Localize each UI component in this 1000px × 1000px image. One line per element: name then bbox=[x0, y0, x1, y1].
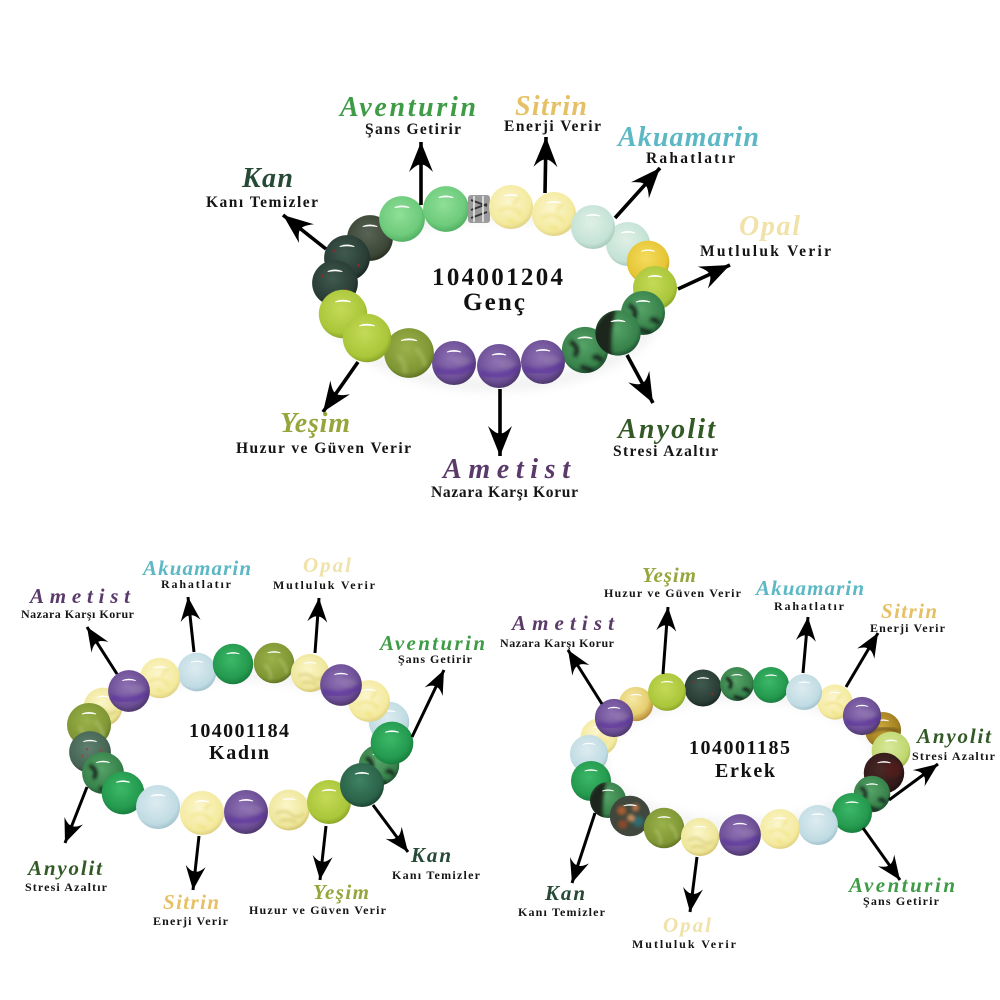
arrow: Ametist left bbox=[87, 627, 117, 674]
label: Kan right: Kan bbox=[544, 881, 585, 905]
bead: ametist bottom bbox=[224, 790, 268, 834]
arrow: Opal bbox=[678, 265, 730, 289]
bead: yeşim bottom bbox=[644, 808, 684, 848]
bracelet: 104001184 Kadın bbox=[67, 643, 413, 835]
label: Aventurin top: Aventurin bbox=[338, 92, 476, 123]
label: Opal left: Opal bbox=[303, 553, 351, 577]
label: Sitrin top: Enerji Verir bbox=[504, 118, 601, 135]
bead: anyolit 1 bbox=[621, 291, 665, 335]
bead: sitrin top bbox=[817, 684, 853, 720]
bead: ametist right bbox=[843, 697, 881, 735]
label: Opal top bbox=[700, 211, 831, 260]
bead: sitrin left bbox=[581, 719, 617, 755]
label: Kan right bbox=[518, 881, 606, 919]
arrow: Yeşim left bbox=[320, 826, 326, 880]
bead: yeşim top bbox=[254, 643, 294, 683]
label: Yeşim left: Huzur ve Güven Verir bbox=[249, 903, 387, 917]
bead: aventurin bottom bbox=[832, 793, 872, 833]
label: Kan right: Kanı Temizler bbox=[518, 905, 606, 919]
label: Anyolit left: Stresi Azaltır bbox=[25, 880, 108, 894]
bead: akuamarin 1 bbox=[571, 205, 615, 249]
bead: anyolit left bbox=[82, 752, 124, 794]
label: Sitrin top: Sitrin bbox=[515, 91, 587, 122]
bead: ametist 1 bbox=[521, 340, 565, 384]
label: Anyolit right bbox=[912, 724, 996, 763]
label: Kan left: Kanı Temizler bbox=[392, 868, 481, 882]
bead: opal left bbox=[84, 688, 122, 726]
bead: anyolit 3 bbox=[562, 327, 608, 373]
label: Anyolit right: Stresi Azaltır bbox=[912, 749, 996, 763]
arrow: Opal left bbox=[315, 598, 319, 653]
label: Anyolit left: Anyolit bbox=[26, 856, 103, 880]
label: Sitrin right: Enerji Verir bbox=[870, 621, 946, 635]
label: Aventurin top: Şans Getirir bbox=[365, 121, 461, 138]
bead: anyolit left bbox=[588, 782, 626, 820]
label: Aventurin left bbox=[378, 631, 485, 666]
arrow: Aventurin bbox=[419, 142, 423, 205]
bead: kan right bbox=[864, 753, 904, 793]
bead: opal top bbox=[291, 654, 329, 692]
label: Aventurin left: Şans Getirir bbox=[398, 652, 473, 666]
label: Opal right: Opal bbox=[663, 913, 711, 937]
bead: aventurin top bbox=[753, 667, 789, 703]
label: Opal right: Mutluluk Verir bbox=[632, 937, 737, 951]
bead: opal top bbox=[619, 687, 653, 721]
bead: sitrin bottom bbox=[180, 791, 224, 835]
bead: yeşim 2 bbox=[343, 314, 391, 362]
label: Yeşim top: Huzur ve Güven Verir bbox=[236, 440, 411, 457]
bead: kan jasper bbox=[610, 796, 650, 836]
arrow: Akuamarin bbox=[615, 168, 660, 218]
bead: yeşim 3 bbox=[319, 290, 367, 338]
arrow: Sitrin right bbox=[846, 633, 878, 687]
bead: akuamarin top bbox=[786, 674, 822, 710]
label: Anyolit top: Stresi Azaltır bbox=[613, 443, 718, 460]
bead: akuamarin bottom bbox=[798, 805, 838, 845]
label: Akuamarin left: Akuamarin bbox=[141, 556, 251, 580]
label: Aventurin top bbox=[338, 92, 476, 138]
product code: 104001204 Genç: 104001204 bbox=[432, 264, 564, 291]
label: Akuamarin right: Akuamarin bbox=[754, 576, 864, 600]
product code: 104001184 Kadın: 104001184 bbox=[189, 720, 289, 742]
bead: aventurin left bbox=[379, 196, 425, 242]
arrow: Kan right bbox=[572, 813, 595, 883]
bead: akuamarin top bbox=[178, 653, 216, 691]
bead: opal 1 bbox=[627, 241, 669, 283]
arrow: Aventurin right bbox=[863, 828, 900, 880]
label: Ametist top bbox=[431, 454, 578, 501]
label: Akuamarin left bbox=[141, 556, 251, 591]
label: Kan top: Kanı Temizler bbox=[206, 194, 318, 211]
label: Anyolit top: Anyolit bbox=[616, 414, 716, 445]
product code: 104001185 Erkek bbox=[689, 737, 790, 782]
arrow: Ametist bbox=[498, 389, 502, 456]
bead: yeşim top bbox=[648, 673, 686, 711]
bead: aventurin left bbox=[102, 772, 144, 814]
label: Opal left: Mutluluk Verir bbox=[273, 578, 376, 592]
label: Anyolit right: Anyolit bbox=[915, 724, 992, 748]
bead: anyolit top bbox=[720, 667, 754, 701]
arrow: Yeşim right bbox=[663, 607, 668, 674]
label: Akuamarin right: Rahatlatır bbox=[774, 599, 845, 613]
arrow: Kan bbox=[283, 215, 326, 249]
bead: opal bottom bbox=[269, 790, 309, 830]
bead: kan left bbox=[69, 731, 111, 773]
arrow: Sitrin left bbox=[193, 836, 199, 890]
product code: 104001185 Erkek: Erkek bbox=[715, 760, 776, 782]
bead: sitrin right bbox=[532, 192, 576, 236]
label: Yeşim right bbox=[604, 563, 742, 600]
label: Ametist top: Ametist bbox=[441, 454, 571, 485]
label: Sitrin left: Enerji Verir bbox=[153, 914, 229, 928]
label: Opal left bbox=[273, 553, 376, 592]
arrow: Kan left bbox=[373, 805, 408, 852]
bead: yeşim bottom bbox=[307, 780, 351, 824]
label: Anyolit left bbox=[25, 856, 108, 894]
label: Ametist top: Nazara Karşı Korur bbox=[431, 484, 578, 501]
product code: 104001185 Erkek: 104001185 bbox=[689, 737, 790, 759]
product code: 104001184 Kadın: Kadın bbox=[209, 742, 269, 764]
bead: kan top bbox=[685, 670, 721, 706]
bracelet: 104001204 Genç bbox=[312, 185, 677, 388]
label: Ametist right bbox=[500, 611, 615, 650]
label: Opal right bbox=[632, 913, 737, 951]
bead: akuamarin 2 bbox=[606, 222, 650, 266]
bead: aventurin right bbox=[371, 722, 413, 764]
label: Ametist left: Nazara Karşı Korur bbox=[21, 607, 135, 621]
label: Akuamarin left: Rahatlatır bbox=[161, 577, 232, 591]
bead: yeşim right bbox=[872, 732, 910, 770]
label: Yeşim right: Yeşim bbox=[642, 563, 696, 587]
bead: aventurin right bbox=[423, 186, 469, 232]
bead: akuamarin left bbox=[570, 735, 608, 773]
label: Sitrin right bbox=[870, 599, 946, 635]
arrow: Ametist right bbox=[568, 650, 602, 704]
arrow: Akuamarin left bbox=[188, 597, 194, 652]
label: Kan top: Kan bbox=[241, 163, 293, 194]
label: Sitrin left: Sitrin bbox=[163, 890, 219, 914]
arrow: Aventurin left bbox=[412, 670, 444, 737]
label: Aventurin right: Aventurin bbox=[847, 873, 955, 897]
label: Akuamarin right bbox=[754, 576, 864, 613]
bead: akuamarin bottom bbox=[136, 785, 180, 829]
arrow: Anyolit left bbox=[65, 787, 87, 843]
bead: opal bottom bbox=[681, 818, 719, 856]
label: Ametist right: Ametist bbox=[510, 611, 615, 635]
bead: opal 2 bbox=[633, 266, 677, 310]
product code: 104001184 Kadın bbox=[189, 720, 289, 764]
bead: ametist 2 bbox=[477, 344, 521, 388]
bead: opal right bbox=[865, 712, 901, 748]
bead: yeşim left bbox=[67, 703, 111, 747]
arrow: Anyolit bbox=[627, 355, 653, 403]
label: Yeşim top: Yeşim bbox=[280, 408, 350, 439]
label: Aventurin left: Aventurin bbox=[378, 631, 485, 655]
bead: sitrin bottom bbox=[760, 809, 800, 849]
arrow: Anyolit right bbox=[889, 764, 938, 800]
label: Sitrin left bbox=[153, 890, 229, 928]
label: Yeşim left: Yeşim bbox=[313, 880, 369, 904]
bead: sitrin left bbox=[489, 185, 533, 229]
label: Sitrin top bbox=[504, 91, 601, 135]
bead: ametist left bbox=[595, 699, 633, 737]
label: Opal top: Opal bbox=[739, 211, 800, 242]
label: Aventurin right: Şans Getirir bbox=[863, 894, 940, 908]
bead: ametist bottom bbox=[719, 814, 761, 856]
bead: metal spacer bbox=[468, 195, 490, 223]
arrow: Akuamarin right bbox=[803, 617, 808, 673]
bead: kan right bbox=[340, 763, 384, 807]
label: Akuamarin top: Akuamarin bbox=[616, 122, 759, 153]
label: Kan left: Kan bbox=[410, 843, 451, 867]
label: Ametist right: Nazara Karşı Korur bbox=[500, 636, 615, 650]
label: Akuamarin top bbox=[616, 122, 759, 167]
bracelet: 104001185 Erkek bbox=[570, 667, 910, 856]
label: Akuamarin top: Rahatlatır bbox=[646, 150, 735, 167]
bead: akuamarin right bbox=[369, 702, 409, 742]
bead: aventurin top bbox=[213, 644, 253, 684]
label: Yeşim left bbox=[249, 880, 387, 917]
bead: kan dark bbox=[312, 260, 358, 306]
product code: 104001204 Genç bbox=[432, 264, 564, 316]
label: Yeşim top bbox=[236, 408, 411, 457]
label: Ametist left bbox=[21, 584, 135, 621]
bead: aventurin left bbox=[571, 761, 611, 801]
bead: kan brown bbox=[347, 215, 393, 261]
label: Aventurin right bbox=[847, 873, 955, 908]
bead: anyolit right bbox=[854, 776, 890, 812]
bead: sitrin top bbox=[140, 658, 180, 698]
label: Anyolit top bbox=[613, 414, 718, 460]
label: Yeşim right: Huzur ve Güven Verir bbox=[604, 586, 742, 600]
arrow: Yeşim bbox=[323, 362, 358, 412]
product code: 104001204 Genç: Genç bbox=[463, 289, 525, 316]
bead: ametist 3 bbox=[432, 341, 476, 385]
label: Kan left bbox=[392, 843, 481, 882]
bead: sitrin right bbox=[348, 680, 390, 722]
arrow: Opal right bbox=[690, 857, 697, 912]
bead: ametist top right bbox=[320, 664, 362, 706]
label: Sitrin right: Sitrin bbox=[881, 599, 937, 623]
bead: anyolit right bbox=[359, 745, 399, 785]
label: Ametist left: Ametist bbox=[28, 584, 131, 608]
label: Kan top bbox=[206, 163, 318, 211]
bead: anyolit 2 bbox=[593, 310, 641, 358]
label: Opal top: Mutluluk Verir bbox=[700, 243, 831, 260]
arrow: Sitrin bbox=[545, 137, 546, 193]
bead: kan red bbox=[324, 235, 370, 281]
bead: yeşim 1 bbox=[384, 328, 434, 378]
bead: ametist left bbox=[108, 670, 150, 712]
